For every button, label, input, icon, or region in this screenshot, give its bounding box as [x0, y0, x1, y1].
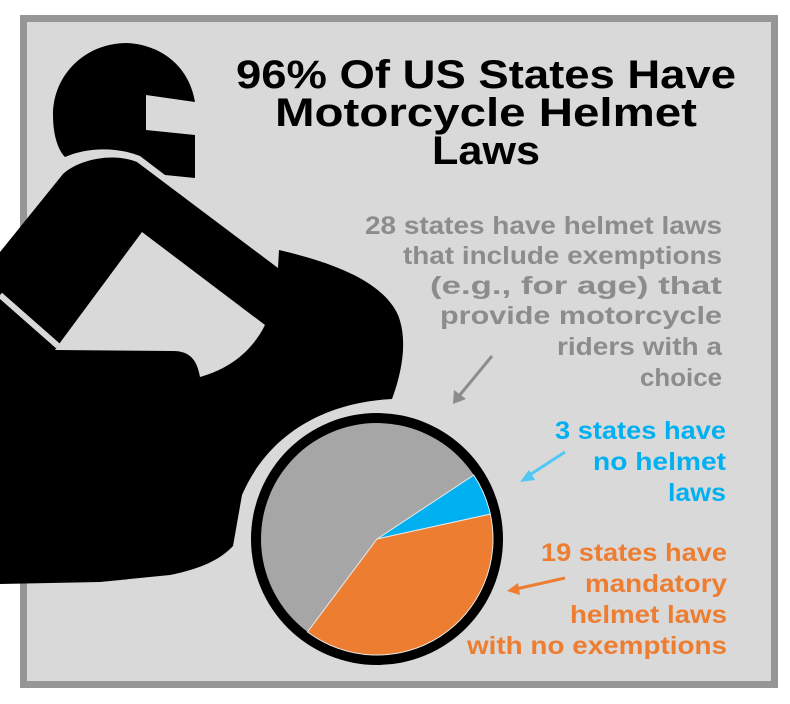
text block: 28 states with exemptions: provide motorcycle	[440, 302, 722, 330]
text block: 19 states mandatory	[466, 539, 727, 660]
title: Motorcycle Helmet	[275, 91, 697, 135]
title	[236, 53, 736, 173]
icon: motorcyclist silhouette	[0, 43, 403, 584]
text block: 19 states mandatory: 19 states have	[541, 539, 727, 567]
title: 96% Of US States Have	[236, 53, 736, 97]
slice: no helmet laws (blue)	[377, 475, 490, 539]
text block: 28 states with exemptions: that include exemptions	[403, 242, 722, 270]
text block: 3 states no helmet laws	[555, 417, 727, 507]
text block: 19 states mandatory: helmet laws	[570, 601, 727, 629]
gap ring around wheel	[243, 405, 511, 673]
text block: 3 states no helmet laws: laws	[668, 479, 726, 507]
arrow: blue	[520, 452, 565, 482]
text block: 28 states with exemptions	[365, 212, 723, 392]
slice: mandatory (orange)	[308, 514, 493, 655]
text block: 28 states with exemptions: 28 states have helmet laws	[365, 212, 722, 240]
title: Laws	[432, 129, 540, 173]
text block: 28 states with exemptions: (e.g., for age) that	[430, 272, 723, 300]
body and bike	[0, 158, 403, 584]
text block: 19 states mandatory: with no exemptions	[466, 632, 727, 660]
arrow: gray	[453, 356, 492, 404]
text block: 3 states no helmet laws: no helmet	[593, 448, 727, 476]
text block: 19 states mandatory: mandatory	[585, 570, 727, 598]
helmet	[53, 43, 195, 178]
text block: 3 states no helmet laws: 3 states have	[555, 417, 726, 445]
pie chart	[251, 413, 503, 665]
arrow: orange	[507, 578, 565, 595]
text block: 28 states with exemptions: riders with a	[557, 333, 723, 361]
arm gap	[55, 232, 265, 377]
text block: 28 states with exemptions: choice	[640, 364, 722, 392]
